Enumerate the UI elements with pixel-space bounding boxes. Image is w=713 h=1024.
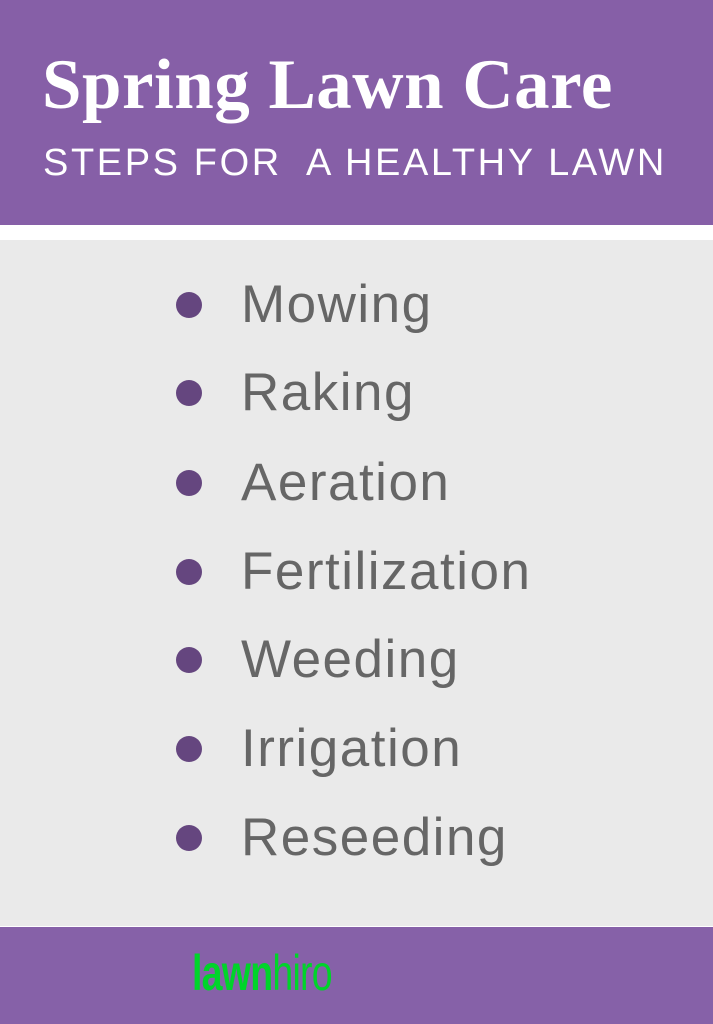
item: Fertilization: Fertilization: [241, 542, 531, 601]
subtitle: STEPS FOR A HEALTHY LAWN: [43, 142, 667, 184]
title: Spring Lawn Care: [42, 46, 613, 124]
logo: lawnhiro: [192, 945, 332, 1001]
item: Mowing: Mowing: [241, 275, 433, 334]
item: Weeding: Weeding: [241, 630, 460, 689]
item: Raking: Raking: [241, 363, 415, 422]
header: [0, 0, 713, 225]
item: Reseeding: Reseeding: [241, 808, 508, 867]
item: Aeration: Aeration: [241, 453, 450, 512]
footer: [0, 927, 713, 1024]
item: Irrigation: Irrigation: [241, 719, 462, 778]
panel: steps list: [0, 240, 713, 926]
